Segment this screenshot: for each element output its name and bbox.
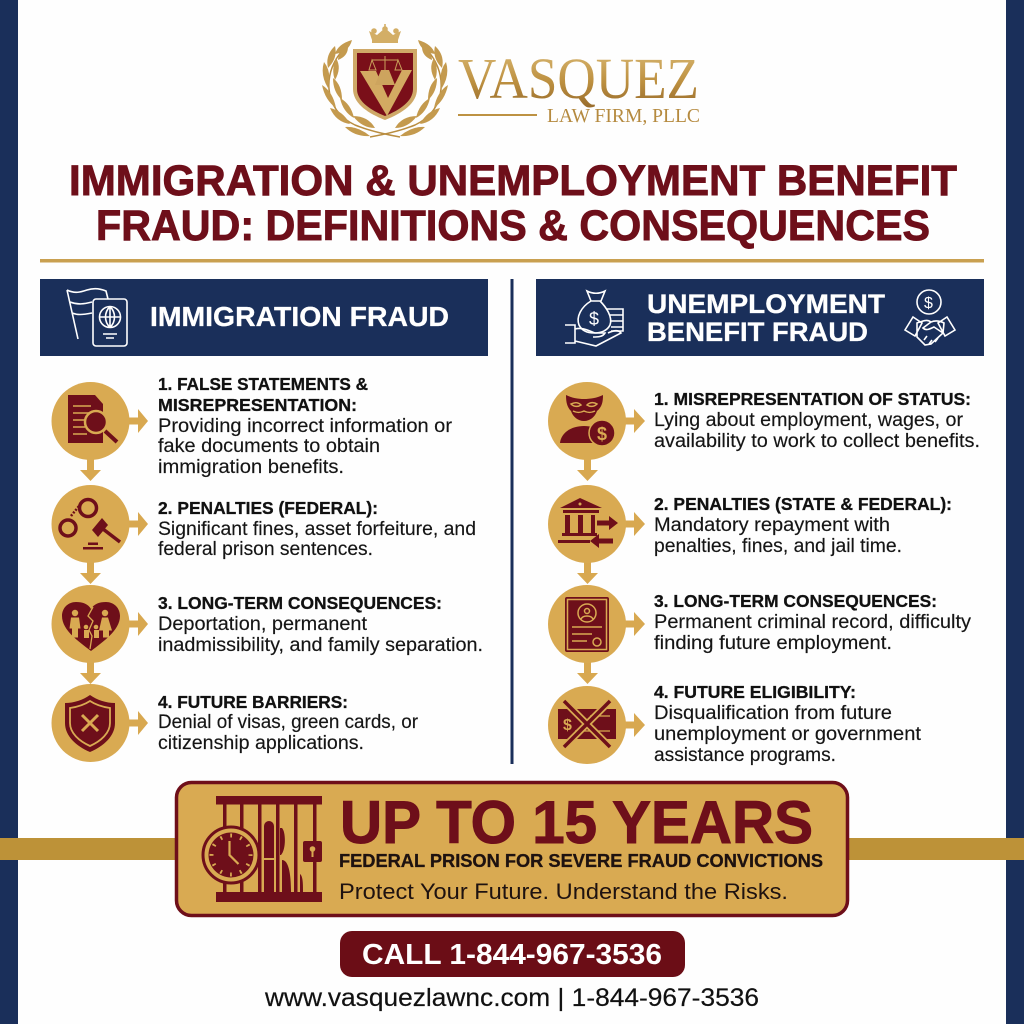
icon: jail bars and clock	[203, 796, 322, 902]
text: fake documents to obtain	[158, 436, 380, 457]
logo subtitle: LAW FIRM, PLLC	[547, 105, 700, 127]
text: citizenship applications.	[158, 733, 364, 754]
callout: up to 15 years	[176, 782, 848, 916]
icon: crossed out check: $	[563, 717, 572, 734]
callout subhead: FEDERAL PRISON FOR SEVERE FRAUD CONVICTIONS	[339, 850, 823, 871]
logo rule	[458, 114, 537, 116]
text	[654, 389, 980, 452]
icon: crossed out check	[548, 686, 626, 764]
step 4: future barriers	[52, 684, 419, 762]
text: Significant fines, asset forfeiture, and	[158, 519, 476, 540]
step 2: penalties federal	[52, 485, 476, 563]
text: Denial of visas, green cards, or	[158, 712, 419, 733]
icon: handshake and coin	[905, 290, 955, 345]
text: finding future employment.	[654, 633, 892, 654]
step 3: long-term consequences	[52, 585, 483, 663]
header text: BENEFIT FRAUD	[647, 317, 868, 347]
text: inadmissibility, and family separation.	[158, 635, 483, 656]
icon: crown	[369, 24, 401, 43]
title: IMMIGRATION & UNEMPLOYMENT BENEFIT	[69, 157, 957, 205]
text: availability to work to collect benefits.	[654, 431, 980, 452]
text: federal prison sentences.	[158, 539, 373, 560]
icon: shield with V	[353, 49, 417, 120]
text	[654, 682, 922, 766]
icon: flag and passport	[67, 289, 127, 346]
column divider	[510, 279, 514, 764]
text: Permanent criminal record, difficulty	[654, 612, 972, 633]
icon: criminal record certificate	[548, 585, 626, 663]
text: Disqualification from future	[654, 703, 892, 724]
title: FRAUD: DEFINITIONS & CONSEQUENCES	[96, 202, 930, 250]
header text: UNEMPLOYMENT	[647, 289, 886, 319]
icon: courthouse with arrows	[548, 485, 626, 563]
panel: immigration fraud	[40, 279, 488, 762]
logo wordmark: VASQUEZ	[458, 46, 699, 111]
text: Mandatory repayment with	[654, 515, 890, 536]
text: 1. MISREPRESENTATION OF STATUS:	[654, 389, 971, 409]
panel: unemployment benefit fraud	[536, 279, 984, 766]
icon: dollar in coin: $	[924, 295, 933, 312]
icon: shield with x	[52, 684, 130, 762]
text	[654, 494, 952, 557]
text: unemployment or government	[654, 724, 922, 745]
icon: broken heart family	[52, 585, 130, 663]
text	[158, 374, 453, 478]
text: 2. PENALTIES (STATE & FEDERAL):	[654, 494, 952, 514]
side bar left	[0, 0, 18, 1024]
side bar right	[1006, 0, 1024, 1024]
text: MISREPRESENTATION:	[158, 395, 357, 415]
text: 3. LONG-TERM CONSEQUENCES:	[654, 591, 937, 611]
step 4: future eligibility	[548, 682, 922, 766]
icon: dollar on bag: $	[589, 309, 599, 329]
text: penalties, fines, and jail time.	[654, 536, 902, 557]
icon: money bag in hand	[565, 291, 623, 346]
step 1: false statements	[52, 374, 453, 478]
header: immigration fraud	[40, 279, 488, 356]
call button: CALL 1-844-967-3536	[362, 939, 662, 971]
step 1: misrepresentation of status	[548, 382, 980, 460]
title	[69, 157, 957, 250]
callout tagline: Protect Your Future. Understand the Risks.	[339, 879, 788, 904]
text: 4. FUTURE ELIGIBILITY:	[654, 682, 856, 702]
text: Lying about employment, wages, or	[654, 410, 964, 431]
logo: Vasquez Law Firm	[322, 24, 700, 137]
call button	[340, 931, 685, 977]
icon: masked person and coin	[548, 382, 626, 460]
header text: IMMIGRATION FRAUD	[150, 301, 449, 332]
title rule	[40, 259, 984, 262]
icon: handcuffs and gavel	[52, 485, 130, 563]
icon: left laurel	[322, 40, 400, 137]
icon: right laurel	[370, 40, 448, 137]
footer contact line: www.vasquezlawnc.com | 1-844-967-3536	[264, 984, 759, 1012]
header: unemployment benefit fraud	[536, 279, 984, 356]
callout headline: UP TO 15 YEARS	[340, 789, 813, 856]
step 3: long-term consequences	[548, 585, 972, 663]
text: 4. FUTURE BARRIERS:	[158, 692, 348, 712]
text: Providing incorrect information or	[158, 416, 453, 437]
text: assistance programs.	[654, 745, 836, 766]
arrows: left column flow	[80, 409, 148, 735]
text: immigration benefits.	[158, 457, 344, 478]
icon: document and magnifier	[52, 382, 130, 460]
icon: masked person and coin: $	[597, 424, 607, 444]
header text	[647, 289, 886, 347]
text	[158, 593, 483, 656]
text: 3. LONG-TERM CONSEQUENCES:	[158, 593, 442, 613]
text: 1. FALSE STATEMENTS &	[158, 374, 368, 394]
arrows: right column flow	[577, 409, 645, 737]
step 2: penalties state and federal	[548, 485, 952, 563]
band behind callout	[0, 838, 1024, 860]
text: 2. PENALTIES (FEDERAL):	[158, 498, 378, 518]
text: Deportation, permanent	[158, 614, 368, 635]
text	[158, 692, 419, 754]
text	[654, 591, 972, 654]
text	[158, 498, 476, 560]
